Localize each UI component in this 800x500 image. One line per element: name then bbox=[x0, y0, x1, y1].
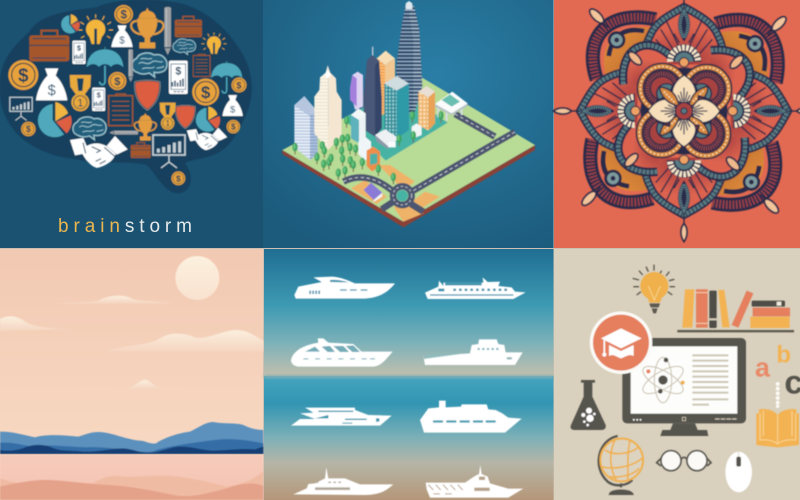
building: pale blue tower bbox=[294, 96, 318, 160]
helipad bbox=[435, 92, 468, 121]
icon: books on shelf bbox=[677, 289, 794, 332]
building: purple tower bbox=[350, 72, 363, 110]
boat 7 bbox=[293, 467, 393, 495]
icon: medals bbox=[70, 75, 176, 130]
building: dark grey spire bbox=[363, 47, 382, 137]
clouds bbox=[0, 296, 263, 389]
letters a b c: a bbox=[755, 353, 770, 383]
mandala inner diagonal petals bbox=[618, 45, 750, 177]
icon: light bulbs bbox=[78, 14, 226, 57]
panel: brainstorm bbox=[0, 0, 263, 248]
icon: trophies bbox=[131, 8, 164, 141]
icon: smartphones bbox=[72, 41, 188, 111]
roads and roundabout bbox=[343, 114, 515, 212]
icon: presentation charts bbox=[10, 97, 185, 168]
icon: money bags bbox=[36, 25, 243, 116]
mountains bbox=[0, 422, 263, 454]
icon: flask bbox=[571, 380, 606, 430]
mandala white rosettes bbox=[617, 44, 751, 178]
mandala centre flower bbox=[639, 66, 729, 156]
heading: brainstorm: brain storm bbox=[58, 216, 192, 237]
panel: education bbox=[554, 249, 800, 500]
icon: open book with dots bbox=[756, 382, 799, 447]
building: orange apartment bbox=[418, 86, 435, 131]
panel: boats bbox=[264, 249, 554, 500]
icon: globe bbox=[599, 436, 643, 494]
trees bbox=[292, 111, 444, 184]
letters a b c bbox=[755, 341, 800, 401]
building: teal tower bbox=[384, 76, 409, 138]
building: cream tower bbox=[314, 65, 342, 150]
boat 6 bbox=[420, 401, 522, 433]
panel: mandala bbox=[553, 0, 800, 248]
icon: shields bbox=[134, 80, 195, 129]
icon: brains bbox=[73, 39, 196, 140]
panel: sunset landscape bbox=[0, 249, 263, 500]
text lines on screen bbox=[692, 355, 728, 405]
city ground block bbox=[282, 77, 535, 227]
small buildings bbox=[358, 123, 422, 202]
icon: atom bbox=[639, 357, 687, 403]
boat 1 bbox=[294, 277, 395, 299]
brain icon collage bbox=[0, 0, 252, 193]
icon: monitor bbox=[622, 338, 746, 436]
icon: coins bbox=[8, 5, 246, 185]
boat 8 bbox=[426, 465, 523, 498]
sun bbox=[175, 256, 219, 300]
boat 4 bbox=[423, 339, 523, 365]
boat 2 bbox=[425, 277, 526, 299]
icon: clipboards bbox=[109, 54, 210, 126]
building: teal-white tower bbox=[351, 108, 366, 143]
boat 3 bbox=[291, 338, 393, 367]
building: orange tower bbox=[377, 51, 395, 117]
icon: computer mouse bbox=[725, 452, 752, 492]
icon: umbrellas bbox=[87, 47, 242, 93]
mandala cardinal petals bbox=[553, 0, 800, 242]
letters a b c: b bbox=[776, 341, 791, 368]
icon: briefcases bbox=[29, 16, 202, 158]
icon: pens bbox=[109, 7, 171, 135]
icon: handshakes bbox=[70, 128, 227, 168]
panel: isometric city bbox=[263, 0, 554, 248]
mandala outer diagonal rings bbox=[580, 7, 788, 215]
brain silhouette bbox=[0, 0, 252, 193]
boat 5 bbox=[291, 408, 392, 426]
skyscraper: tall striped tower bbox=[396, 1, 422, 117]
icon: graduation cap badge bbox=[590, 311, 652, 374]
icon: pie charts bbox=[38, 14, 220, 137]
icon: light bulb bbox=[633, 265, 675, 313]
icon: glasses bbox=[657, 451, 711, 471]
reflected hills bbox=[0, 472, 263, 500]
sea band bbox=[0, 455, 263, 500]
